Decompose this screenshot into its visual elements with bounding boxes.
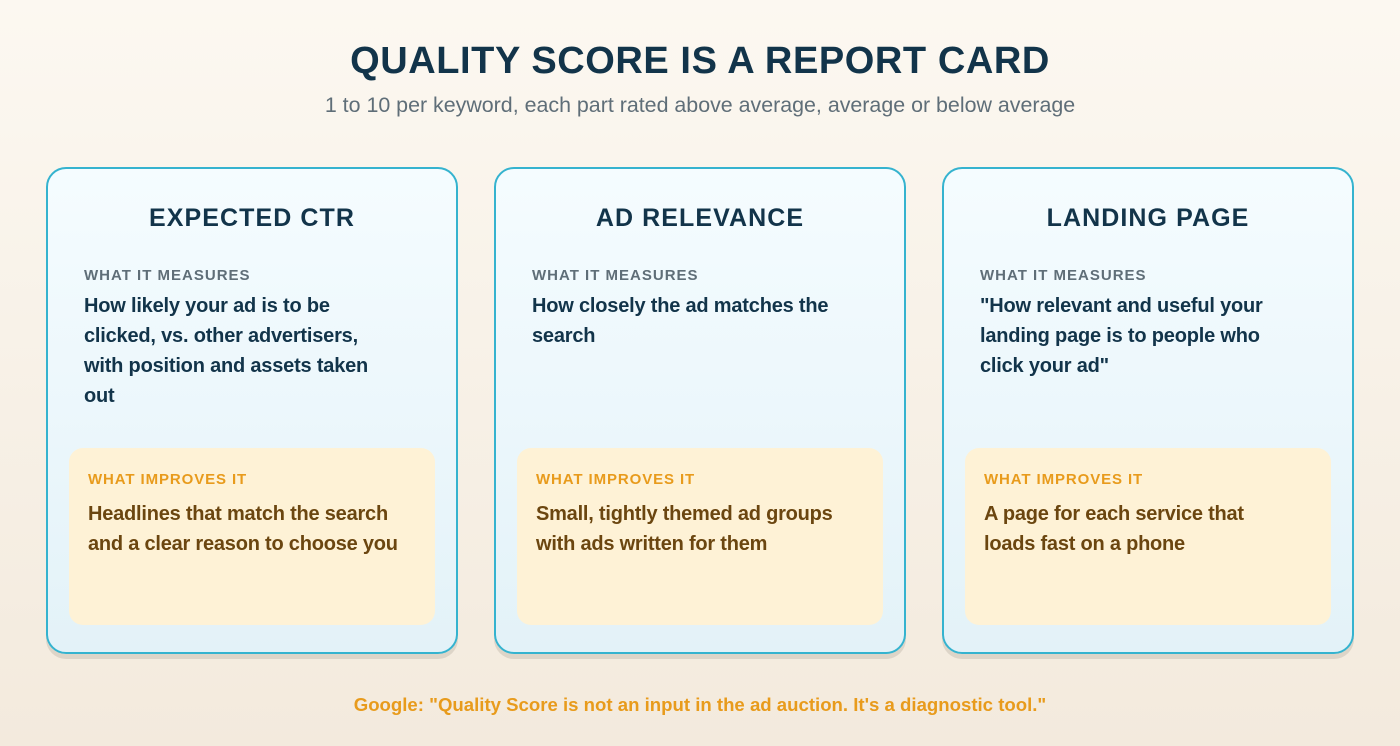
- text: expected CTR measure: [84, 295, 368, 407]
- text: ad relevance improvement: [536, 503, 833, 555]
- footer quote: Google: "Quality Score is not an input in the ad auction. It's a diagnostic tool.": [354, 694, 1046, 715]
- text: landing page improvement: loads fast on a phone: [984, 533, 1185, 555]
- text: expected CTR measure: How likely your ad is to be: [84, 295, 330, 317]
- text: ad relevance improvement: with ads written for them: [536, 533, 767, 555]
- panel: landing page: [942, 167, 1354, 654]
- subtitle: 1 to 10 per keyword, each part rated above average, average or below average: [325, 93, 1075, 117]
- text: landing page improvement: A page for each service that: [984, 503, 1244, 525]
- label: what it measures: WHAT IT MEASURES: [84, 267, 251, 284]
- callout: what improves ad relevance: [517, 448, 883, 625]
- text: landing page measure: [980, 295, 1263, 377]
- text: ad relevance improvement: Small, tightly themed ad groups: [536, 503, 833, 525]
- label: what it measures: WHAT IT MEASURES: [532, 267, 699, 284]
- heading: expected CTR: EXPECTED CTR: [149, 204, 355, 232]
- text: expected CTR improvement: Headlines that match the search: [88, 503, 388, 525]
- heading: ad relevance: AD RELEVANCE: [596, 204, 804, 232]
- text: ad relevance measure: [532, 295, 828, 347]
- panel: ad relevance: [494, 167, 906, 654]
- label: what improves it: WHAT IMPROVES IT: [88, 471, 247, 488]
- callout: what improves expected CTR: [69, 448, 435, 625]
- text: ad relevance measure: search: [532, 325, 595, 347]
- text: expected CTR measure: out: [84, 385, 114, 407]
- text: expected CTR improvement: [88, 503, 398, 555]
- heading: landing page: LANDING PAGE: [1047, 204, 1249, 232]
- text: landing page measure: landing page is to people who: [980, 325, 1260, 347]
- callout: what improves landing page: [965, 448, 1331, 625]
- text: ad relevance measure: How closely the ad matches the: [532, 295, 828, 317]
- text: landing page measure: "How relevant and useful your: [980, 295, 1263, 317]
- text: expected CTR improvement: and a clear reason to choose you: [88, 533, 398, 555]
- title: QUALITY SCORE IS A REPORT CARD: [350, 40, 1050, 82]
- text: landing page improvement: [984, 503, 1244, 555]
- label: what it measures: WHAT IT MEASURES: [980, 267, 1147, 284]
- text: expected CTR measure: with position and assets taken: [84, 355, 368, 377]
- label: what improves it: WHAT IMPROVES IT: [536, 471, 695, 488]
- text: landing page measure: click your ad": [980, 355, 1109, 377]
- panel: expected CTR: [46, 167, 458, 654]
- label: what improves it: WHAT IMPROVES IT: [984, 471, 1143, 488]
- text: expected CTR measure: clicked, vs. other advertisers,: [84, 325, 358, 347]
